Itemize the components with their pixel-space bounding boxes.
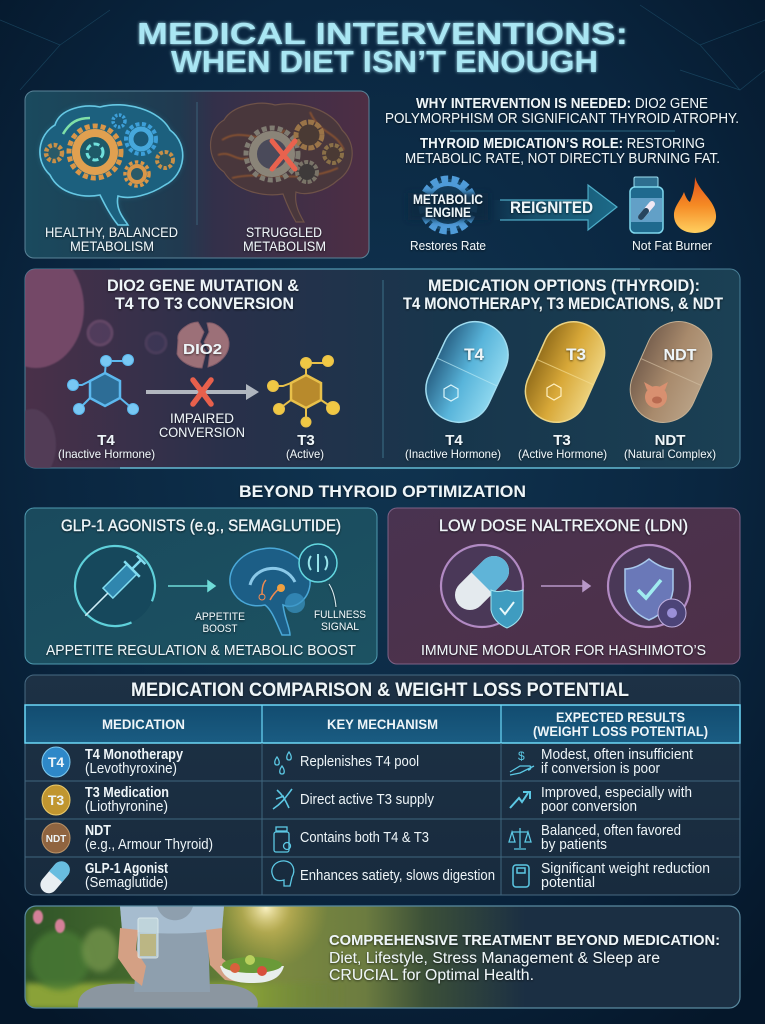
- label: T4: [58, 432, 155, 461]
- text block: comprehensive treatment: Diet, Lifestyle, Stress Management & Sleep are: [329, 950, 660, 967]
- icon: shield with virus: [608, 545, 690, 627]
- caption: GLP-1: APPETITE REGULATION & METABOLIC BOOST: [46, 642, 356, 659]
- icon: metabolic engine gear: METABOLIC: [413, 192, 483, 207]
- decoration: pink cells: [25, 269, 168, 468]
- arrow: to brain: [168, 581, 215, 591]
- label: T3 capsule: [518, 432, 607, 461]
- icon: flame: [674, 177, 716, 233]
- row: GLP-1 agonist: (Semaglutide): [85, 875, 168, 891]
- caption: struggled: METABOLISM: [243, 239, 326, 254]
- heading: beyond thyroid optimization: BEYOND THYROID OPTIMIZATION: [239, 482, 526, 501]
- row: T4 monotherapy: T4: [48, 754, 64, 770]
- arrow: to shield: [541, 581, 590, 591]
- row: NDT: NDT: [46, 834, 66, 845]
- label: NDT capsule: (Natural Complex): [624, 447, 716, 461]
- icon: syringe: [64, 535, 166, 637]
- caption: struggled: [243, 225, 326, 254]
- arrow: impaired conversion: [146, 380, 259, 404]
- heading: GLP-1: GLP-1 AGONISTS (e.g., SEMAGLUTIDE): [61, 516, 341, 535]
- row: NDT: (e.g., Armour Thyroid): [85, 837, 213, 853]
- heading: DIO2: T4 TO T3 CONVERSION: [115, 294, 294, 313]
- text block: comprehensive treatment: [329, 932, 720, 984]
- panel: metabolism brains: [25, 91, 369, 258]
- icon: struggled brain with gears: [210, 103, 352, 222]
- heading: DIO2: [107, 276, 299, 313]
- row: NDT: [42, 823, 681, 853]
- row: GLP-1 agonist: Enhances satiety, slows digestion: [300, 868, 495, 884]
- panel: DIO2 and medication options: [24, 268, 740, 469]
- icon: metabolic engine gear: [408, 179, 488, 231]
- row: T3 medication: Direct active T3 supply: [300, 792, 435, 808]
- row: GLP-1 agonist: Significant weight reduction: [541, 861, 710, 877]
- label: T3 capsule: (Active Hormone): [518, 447, 607, 461]
- icon: healthy brain with gears: [40, 105, 183, 225]
- row: T4 monotherapy: if conversion is poor: [541, 761, 660, 777]
- caption: struggled: STRUGGLED: [246, 225, 322, 240]
- heading: medication options: MEDICATION OPTIONS (THYROID):: [428, 276, 700, 295]
- table header row: KEY MECHANISM: [327, 716, 438, 732]
- label: fullness signal: FULLNESS: [314, 609, 366, 621]
- label: restores rate: Restores Rate: [410, 238, 486, 253]
- panel: GLP-1 agonists: [25, 508, 377, 664]
- text block: comprehensive treatment: CRUCIAL for Optimal Health.: [329, 967, 534, 984]
- label: T3: (Active): [286, 447, 324, 461]
- icon: medicine bottle: [630, 177, 663, 233]
- text block: why intervention: [385, 96, 739, 127]
- table header row: (WEIGHT LOSS POTENTIAL): [533, 723, 708, 739]
- row: NDT: Balanced, often favored: [541, 823, 681, 839]
- panel: low dose naltrexone: [388, 508, 740, 664]
- label: T3 capsule: T3: [553, 432, 571, 449]
- text block: comprehensive treatment: COMPREHENSIVE TREATMENT BEYOND MEDICATION:: [329, 932, 720, 949]
- photo: person with salad: [26, 906, 500, 1008]
- row: T3 medication: [42, 785, 692, 815]
- row: NDT: Contains both T4 & T3: [300, 830, 429, 846]
- label: T4 capsule: T4: [445, 432, 463, 449]
- icon: T3 molecule: [268, 356, 340, 427]
- text block: thyroid role: METABOLIC RATE, NOT DIRECTLY BURNING FAT.: [405, 151, 720, 167]
- arrow: reignited: REIGNITED: [510, 199, 593, 217]
- heading: medication options: [403, 276, 724, 313]
- caption: LDN: IMMUNE MODULATOR FOR HASHIMOTO’S: [421, 642, 706, 659]
- label: T3: [286, 432, 324, 461]
- heading: DIO2: DIO2 GENE MUTATION &: [107, 276, 299, 295]
- label: T4 capsule: [405, 432, 501, 461]
- label: fullness signal: SIGNAL: [321, 621, 359, 633]
- label: T4: (Inactive Hormone): [58, 447, 155, 461]
- icon: NDT capsule: [620, 311, 722, 433]
- icon: T4 capsule: T4: [464, 345, 484, 364]
- label: impaired conversion: IMPAIRED: [170, 411, 234, 426]
- label: appetite boost: BOOST: [202, 623, 238, 635]
- icon: pill with shield: [441, 545, 523, 628]
- label: appetite boost: APPETITE: [195, 611, 245, 623]
- title: MEDICAL INTERVENTIONS:: [137, 16, 628, 51]
- caption: healthy: HEALTHY, BALANCED: [45, 225, 178, 240]
- heading: medication options: T4 MONOTHERAPY, T3 MEDICATIONS, & NDT: [403, 294, 724, 313]
- caption: healthy: [45, 225, 178, 254]
- text block: thyroid role: THYROID MEDICATION’S ROLE: RESTORING: [420, 136, 705, 152]
- table header row: [25, 705, 740, 743]
- label: T3: T3: [297, 432, 315, 449]
- row: GLP-1 agonist: GLP-1 Agonist: [85, 861, 168, 877]
- label: not fat burner: Not Fat Burner: [632, 238, 713, 253]
- arrow: reignited: [490, 185, 617, 230]
- icon: DIO2 enzyme: [177, 322, 229, 368]
- label: impaired conversion: [159, 411, 245, 440]
- label: fullness signal: [314, 584, 366, 633]
- heading: table title: MEDICATION COMPARISON & WEIGHT LOSS POTENTIAL: [131, 680, 629, 701]
- text block: why intervention: POLYMORPHISM OR SIGNIFICANT THYROID ATROPHY.: [385, 111, 739, 127]
- row: GLP-1 agonist: [37, 858, 710, 897]
- row: NDT: by patients: [541, 837, 607, 853]
- text block: why intervention: WHY INTERVENTION IS NEEDED: DIO2 GENE: [416, 96, 708, 112]
- row: T3 medication: poor conversion: [541, 799, 637, 815]
- label: NDT capsule: NDT: [655, 432, 685, 449]
- icon: NDT capsule: NDT: [664, 347, 697, 364]
- label: T4 capsule: (Inactive Hormone): [405, 447, 501, 461]
- row: T4 monotherapy: Modest, often insufficient: [541, 747, 693, 763]
- icon: T3 capsule: T3: [566, 345, 586, 364]
- row: T3 medication: T3: [48, 792, 64, 808]
- panel: comparison table: [25, 675, 740, 897]
- row: T4 monotherapy: (Levothyroxine): [85, 761, 177, 777]
- row: T3 medication: (Liothyronine): [85, 799, 168, 815]
- row: T4 monotherapy: $: [518, 749, 525, 763]
- row: T4 monotherapy: Replenishes T4 pool: [300, 754, 419, 770]
- panel: comprehensive treatment: [24, 905, 741, 1009]
- caption: healthy: METABOLISM: [70, 239, 154, 254]
- icon: T3 capsule: [516, 312, 614, 432]
- table header row: MEDICATION: [102, 716, 185, 732]
- title: WHEN DIET ISN’T ENOUGH: [171, 44, 598, 79]
- icon: brain with appetite signals: [230, 544, 337, 635]
- icon: T4 capsule: [415, 311, 519, 433]
- icon: metabolic engine gear: ENGINE: [425, 205, 471, 220]
- label: NDT capsule: [624, 432, 716, 461]
- text block: thyroid role: [405, 136, 720, 167]
- table header row: EXPECTED RESULTS: [556, 709, 685, 725]
- icon: DIO2 enzyme: DIO2: [183, 341, 222, 358]
- row: T3 medication: Improved, especially with: [541, 785, 692, 801]
- row: T4 monotherapy: T4 Monotherapy: [85, 747, 183, 763]
- row: T3 medication: T3 Medication: [85, 785, 169, 801]
- title: [137, 16, 628, 79]
- label: impaired conversion: CONVERSION: [159, 425, 245, 440]
- label: T4: T4: [97, 432, 115, 449]
- label: appetite boost: [195, 611, 245, 635]
- icon: T4 molecule: [68, 354, 138, 414]
- row: GLP-1 agonist: potential: [541, 875, 595, 891]
- row: NDT: NDT: [85, 823, 111, 839]
- row: T4 monotherapy: [42, 747, 693, 777]
- heading: LDN: LOW DOSE NALTREXONE (LDN): [439, 516, 688, 535]
